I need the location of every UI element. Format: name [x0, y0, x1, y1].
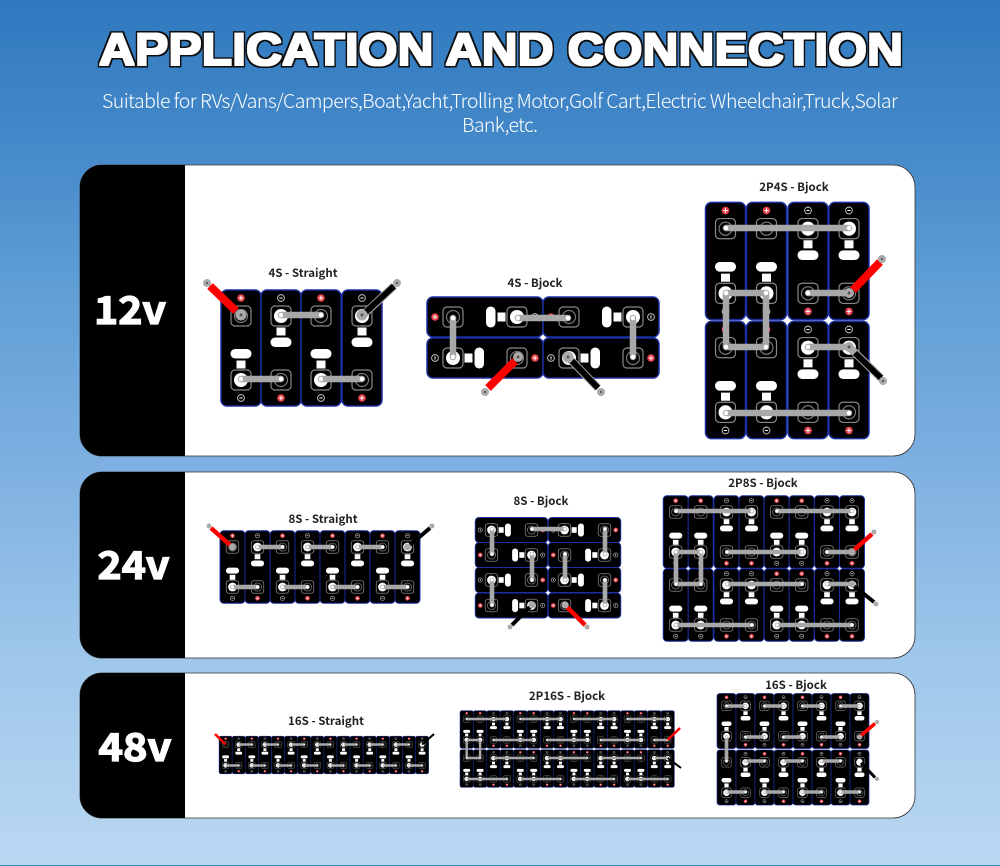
panel background: [80, 673, 915, 818]
diagram title: 8S - Straight: [288, 511, 358, 527]
battery cells: [663, 496, 864, 641]
diagram title: 4S - Bjock: [508, 275, 563, 291]
diagram: 2P8S Bjock: [663, 475, 878, 641]
voltage label: 48v: [98, 717, 172, 772]
red cable: [668, 728, 680, 740]
voltage tab: [80, 165, 185, 456]
red cable: [206, 524, 236, 550]
battery cells: [706, 202, 869, 439]
subtitle: Bank,etc.: [462, 109, 538, 138]
voltage tab: [80, 673, 185, 818]
diagram title: 2P4S - Bjock: [759, 179, 829, 195]
bus bars: [232, 547, 408, 587]
diagram title: 2P8S - Bjock: [728, 475, 798, 491]
subtitle: [102, 85, 899, 138]
red cable: [857, 720, 879, 740]
diagram title: 16S - Bjock: [765, 677, 827, 693]
battery cells: [427, 297, 659, 378]
battery cells: [475, 518, 621, 618]
red cable: [215, 734, 226, 744]
voltage label: 12v: [94, 280, 166, 335]
red cable: [481, 352, 523, 396]
panel: 48v: [80, 673, 915, 818]
black cable: [356, 279, 401, 320]
diagram: 4S Bjock: [427, 275, 659, 396]
bus bars: [676, 511, 852, 625]
subtitle: Suitable for RVs/Vans/Campers,Boat,Yacht,Trolling Motor,Golf Cart,Electric Wheelchair,Truck,Solar: [102, 85, 899, 114]
title: APPLICATION AND CONNECTION: [99, 24, 903, 75]
diagram: 8S Bjock: [475, 493, 621, 630]
black cable: [857, 758, 879, 781]
panel background: [80, 472, 915, 658]
diagram: 2P16S Bjock: [460, 688, 681, 787]
voltage tab: [80, 472, 185, 658]
diagram title: 2P16S - Bjock: [529, 688, 605, 704]
bus bars: [226, 744, 422, 766]
bus bars: [241, 315, 362, 379]
black cable: [562, 352, 605, 396]
panel: 24v: [80, 472, 915, 658]
red cable: [844, 255, 886, 298]
diagram: 8S straight: [206, 511, 434, 603]
bus bars: [467, 719, 668, 779]
bus bars: [726, 228, 849, 413]
voltage label: 24v: [98, 535, 170, 590]
red cable: [848, 530, 876, 556]
black cable: [404, 524, 434, 550]
bus bars: [492, 529, 605, 605]
diagram: 16S Bjock: [717, 677, 879, 805]
black cable: [668, 758, 681, 768]
diagram title: 16S - Straight: [288, 713, 364, 729]
black cable: [508, 602, 536, 630]
battery cells: [221, 290, 382, 406]
diagram: 2P4S Bjock: [706, 179, 887, 439]
black cable: [422, 734, 434, 744]
red cable: [203, 279, 246, 320]
panel background: [80, 165, 915, 456]
battery cells: [219, 736, 429, 774]
black cable: [844, 342, 887, 385]
black cable: [848, 580, 878, 606]
red cable: [562, 602, 590, 630]
diagram title: 8S - Bjock: [514, 493, 569, 509]
panel: 12v: [80, 165, 915, 456]
battery cells: [717, 693, 869, 805]
battery cells: [460, 711, 674, 787]
bus bars: [726, 706, 860, 792]
bus bars: [453, 318, 633, 357]
bottom edge line: [0, 865, 1000, 866]
diagram: 16S straight: [215, 713, 434, 774]
diagram title: 4S - Straight: [268, 265, 338, 281]
diagram: 4S straight: [203, 265, 401, 406]
battery cells: [220, 531, 420, 603]
